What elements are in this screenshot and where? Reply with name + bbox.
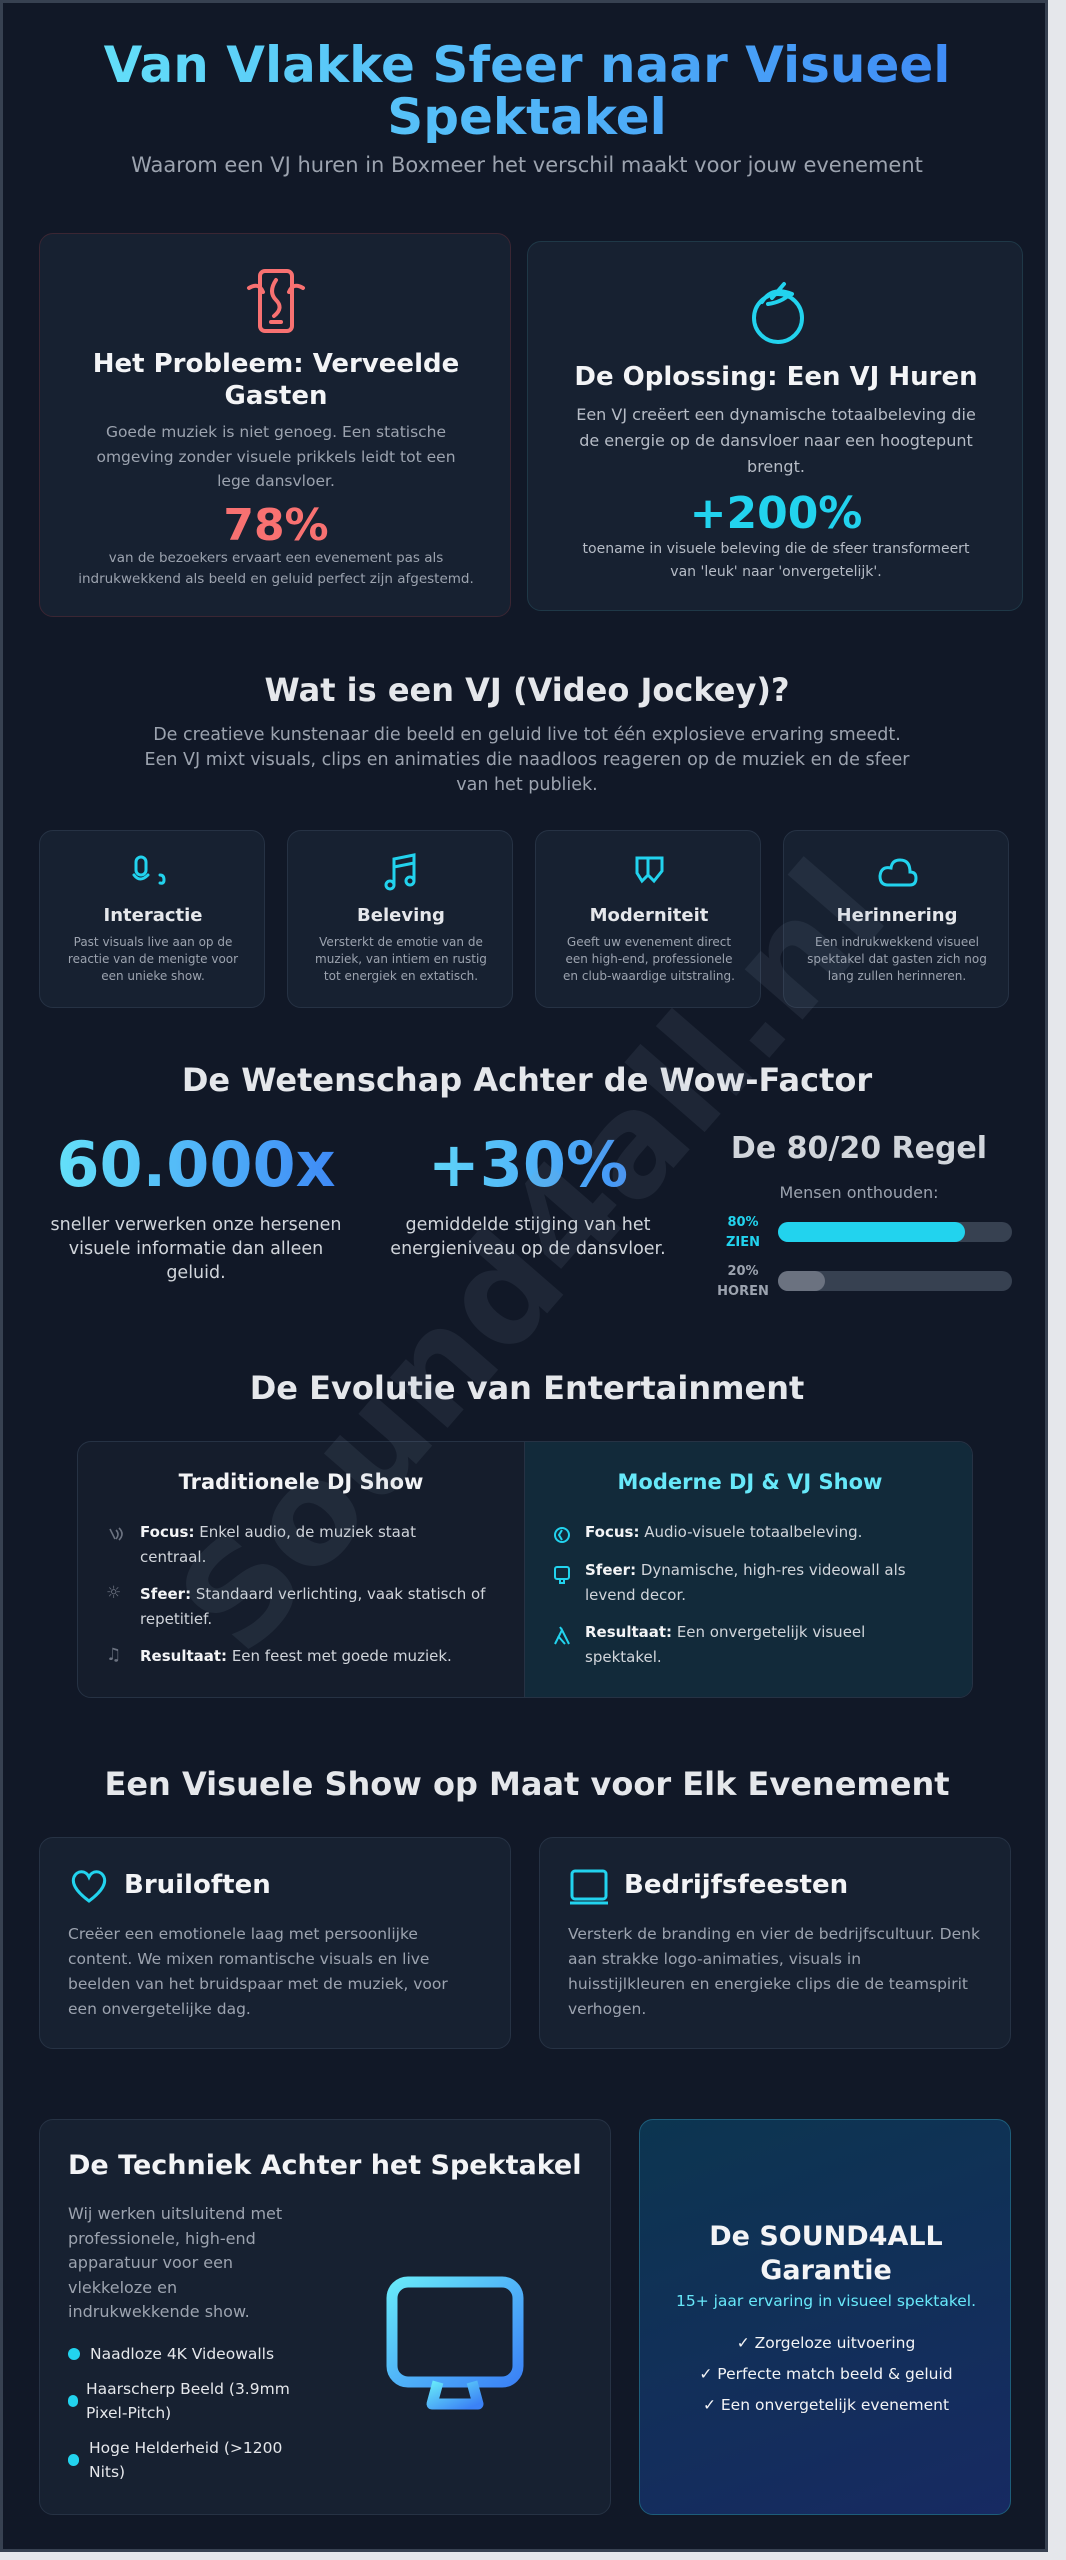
card: herinnering (783, 830, 1009, 1008)
stat: +30%: +30% (428, 1128, 628, 1201)
stat: +30%: gemiddelde stijging van het energieniveau op de dansvloer. (390, 1215, 666, 1259)
panel: bedrijfsfeesten: Versterk de branding en vier de bedrijfscultuur. Denk aan strakke logo-animaties, visuals in huisstijlkleuren en energieke clips die de teamspirit verhogen. (568, 1925, 980, 2018)
stat: 60.000x: 60.000x (56, 1128, 336, 1201)
card: interactie (39, 830, 265, 1008)
heading: Gasten (225, 381, 327, 411)
icon: shield (636, 856, 664, 884)
panel: comparison (77, 1441, 973, 1698)
bar: horen: 20% (727, 1264, 759, 1279)
checklist: ✓ Perfecte match beeld & geluid (699, 2365, 953, 2383)
card: moderniteit (535, 830, 761, 1008)
card: moderniteit: Geeft uw evenement direct een high-end, professionele en club-waardige uitstraling. (563, 935, 735, 983)
checklist: ✓ Een onvergetelijk evenement (703, 2396, 949, 2414)
card: moderniteit: Moderniteit (590, 905, 708, 926)
chart: 80/20 regel (717, 1131, 1012, 1299)
list (68, 2345, 290, 2481)
panel: garantie: De SOUND4ALL (709, 2221, 943, 2252)
panel: garantie (639, 2119, 1011, 2515)
text: Past visuals live aan op de reactie van de menigte voor een unieke show. (68, 935, 238, 983)
stat: 60.000x: sneller verwerken onze hersenen visuele informatie dan alleen geluid. (51, 1215, 341, 1283)
heading: De Oplossing: Een VJ Huren (574, 362, 978, 392)
heading: Het Probleem: Verveelde (93, 349, 459, 379)
heading: wetenschap: De Wetenschap Achter de Wow-Factor (182, 1061, 872, 1099)
caption: toename in visuele beleving die de sfeer transformeert van 'leuk' naar 'onvergetelijk'. (583, 541, 969, 580)
heading: evolutie: De Evolutie van Entertainment (250, 1369, 804, 1407)
panel: garantie: Garantie (760, 2255, 892, 2286)
heading: visuele show op maat: Een Visuele Show op Maat voor Elk Evenement (104, 1765, 950, 1803)
icon: result (554, 1626, 570, 1645)
watermark: Sound4all.nl (148, 832, 917, 1683)
bar: horen: HOREN (717, 1284, 769, 1299)
intro text: De creatieve kunstenaar die beeld en geluid live tot één explosieve ervaring smeedt. Een VJ mixt visuals, clips en animaties die naadloos reageren op de muziek en de sfeer van het publiek. (145, 725, 909, 795)
text (68, 905, 238, 983)
feature cards (39, 830, 1009, 1008)
panel: techniek: De Techniek Achter het Spektakel (68, 2150, 582, 2181)
icon: phone (246, 269, 306, 333)
body: Goede muziek is niet genoeg. Een statische omgeving zonder visuele prikkels leidt tot een lege dansvloer. (96, 423, 456, 490)
column: traditioneel: Resultaat: Een feest met goede muziek. (140, 1647, 452, 1665)
heading (93, 349, 459, 411)
column: modern (524, 1442, 974, 1699)
column: traditioneel: Traditionele DJ Show (179, 1470, 423, 1494)
column: traditioneel (106, 1470, 486, 1665)
panel: bruiloften: Bruiloften (124, 1870, 271, 1900)
list: Haarscherp Beeld (3.9mm Pixel-Pitch) (86, 2380, 290, 2422)
icon: light: ☼ (106, 1583, 121, 1603)
panel: garantie: 15+ jaar ervaring in visueel spektakel. (676, 2292, 976, 2310)
card: herinnering: Een indrukwekkend visueel spektakel dat gasten zich nog lang zullen herinneren. (807, 935, 987, 983)
stat 78%: 78% (223, 500, 329, 551)
icon: note: ♫ (106, 1645, 121, 1665)
list: Hoge Helderheid (>1200 Nits) (89, 2438, 282, 2481)
icon: speaker (109, 1528, 123, 1540)
text: Wij werken uitsluitend met professionele, high-end apparatuur voor een vlekkeloze en indrukwekkende show. (68, 2204, 282, 2321)
body: Een VJ creëert een dynamische totaalbeleving die de energie op de dansvloer naar een hoogtepunt brengt. (576, 405, 976, 476)
column: modern: Sfeer: Dynamische, high-res videowall als levend decor. (585, 1561, 906, 1604)
bar: zien: ZIEN (726, 1235, 760, 1250)
list: Naadloze 4K Videowalls (90, 2345, 274, 2363)
stat: +30% (390, 1128, 666, 1259)
icon: music note (384, 853, 416, 890)
icon: screen (554, 1566, 570, 1584)
card: beleving: Beleving (357, 905, 445, 926)
bar: zien (726, 1215, 760, 1250)
caption: van de bezoekers ervaart een evenement pas als indrukwekkend als beeld en geluid perfect zijn afgestemd. (78, 550, 474, 587)
panel: bruiloften: Creëer een emotionele laag met persoonlijke content. We mixen romantische visuals en live beelden van het bruidspaar met de muziek, voor een onvergetelijke dag. (68, 1925, 448, 2018)
column: modern: Resultaat: Een onvergetelijk visueel spektakel. (585, 1623, 865, 1666)
panel: techniek (39, 2119, 611, 2515)
checklist (699, 2334, 953, 2414)
text: Interactie (104, 905, 202, 926)
panel: bruiloften (39, 1837, 511, 2049)
title: Spektakel (387, 88, 667, 146)
icon: monitor (386, 2276, 524, 2410)
column: traditioneel: Sfeer: Standaard verlichting, vaak statisch of repetitief. (140, 1585, 485, 1628)
heading: wat is een VJ: Wat is een VJ (Video Jockey)? (264, 671, 790, 709)
panel: problem (39, 233, 511, 617)
icon: solution (752, 282, 804, 344)
column: modern: Focus: Audio-visuele totaalbeleving. (585, 1523, 862, 1541)
subtitle: Waarom een VJ huren in Boxmeer het verschil maakt voor jouw evenement (131, 153, 923, 177)
card: beleving (287, 830, 513, 1008)
stat: 60.000x (51, 1128, 341, 1283)
icon: cloud (878, 858, 918, 886)
card: beleving: Versterkt de emotie van de muziek, van intiem en rustig tot energiek en extatisch. (315, 935, 487, 983)
icon: focus (554, 1527, 570, 1543)
icon: interactie (132, 856, 166, 885)
title: Van Vlakke Sfeer naar Visueel (104, 36, 950, 94)
chart: 80/20 regel: Mensen onthouden: (780, 1183, 938, 1202)
column: traditioneel: Focus: Enkel audio, de muziek staat centraal. (140, 1523, 416, 1566)
icon: laptop (570, 1870, 608, 1904)
bar: horen (717, 1264, 769, 1299)
panel: solution (527, 241, 1023, 611)
chart: 80/20 regel: De 80/20 Regel (731, 1131, 987, 1166)
stat +200%: +200% (690, 488, 862, 539)
panel: bedrijfsfeesten (539, 1837, 1011, 2049)
icon: heart (72, 1870, 106, 1903)
bar: zien: 80% (727, 1215, 759, 1230)
panel: bedrijfsfeesten: Bedrijfsfeesten (624, 1870, 848, 1900)
title (3, 39, 1051, 143)
card: herinnering: Herinnering (837, 905, 957, 926)
checklist: ✓ Zorgeloze uitvoering (737, 2334, 915, 2352)
column: modern: Moderne DJ & VJ Show (618, 1470, 882, 1494)
